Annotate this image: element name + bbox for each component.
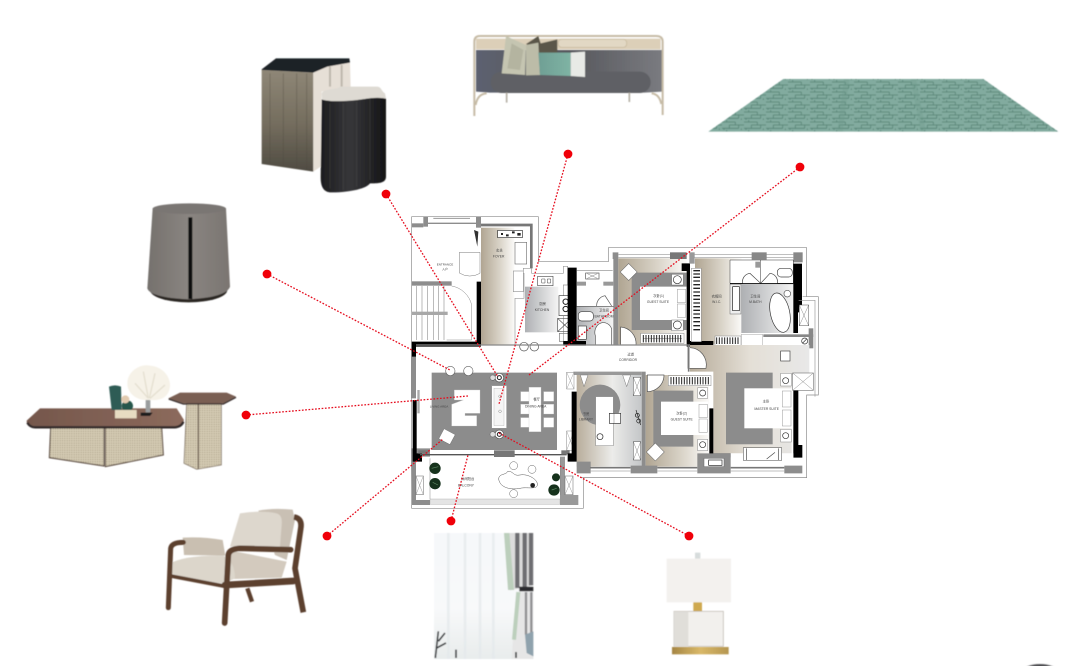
lower plan — [411, 345, 813, 505]
dining table: 餐厅 — [533, 397, 541, 402]
line: side tables — [386, 194, 498, 377]
foyer — [481, 225, 531, 345]
living and dining rug — [432, 373, 557, 450]
line: curtain — [451, 455, 468, 521]
side table top — [168, 393, 236, 403]
upper drape — [504, 533, 533, 591]
guest suite lower — [646, 375, 711, 467]
brass stem — [693, 602, 702, 612]
guest suite lower: GUEST SUITE — [671, 417, 694, 421]
rear frame — [294, 517, 303, 612]
kitchen — [515, 266, 572, 351]
library: 书房 — [583, 411, 590, 416]
entrance and stairs — [412, 217, 481, 340]
master suite: MASTER SUITE — [754, 407, 780, 411]
line: armchair — [327, 439, 443, 536]
kitchen: 厨房 — [539, 301, 547, 306]
kitchen: KITCHEN — [535, 308, 550, 312]
entrance and stairs: ENTRANCE — [437, 263, 453, 267]
cane back — [476, 39, 661, 49]
lower drape — [512, 592, 533, 659]
corridor divider — [416, 343, 690, 347]
walk-in closet — [682, 258, 742, 347]
balcony: BALCONY — [458, 484, 475, 488]
floor plan — [411, 217, 818, 508]
lower back — [228, 550, 287, 579]
corridor label: CORRIDOR — [619, 358, 638, 362]
side table base — [184, 403, 221, 469]
connector lines — [246, 154, 800, 536]
entrance and stairs: 入户 — [442, 266, 448, 271]
rug — [700, 77, 1067, 133]
coffee table — [492, 386, 507, 428]
red markers — [242, 150, 804, 540]
stools — [446, 366, 473, 376]
side tables — [490, 373, 504, 439]
arm cushion — [183, 537, 225, 556]
divider wall — [642, 372, 646, 467]
living room sofa: LIVING AREA — [430, 405, 448, 409]
mirrored base — [674, 611, 723, 646]
library — [567, 372, 642, 467]
line: stool — [267, 274, 450, 370]
sofa — [474, 36, 663, 116]
foyer: 玄关 — [496, 247, 503, 252]
sheer folds — [448, 533, 493, 659]
corner fragment — [1023, 664, 1057, 666]
bathroom — [563, 268, 614, 346]
seat cushion — [168, 556, 235, 584]
balcony planters — [429, 463, 560, 496]
balcony lounge set — [499, 462, 537, 498]
master suite: 主卧 — [763, 398, 770, 403]
vase and flowers — [109, 365, 170, 418]
stool — [147, 203, 230, 302]
plan outer outline — [412, 217, 818, 508]
living room sofa — [430, 390, 480, 426]
upholstered back — [476, 50, 662, 93]
armchair plan — [439, 429, 455, 445]
line: coffee tables — [246, 396, 468, 415]
lamp shade — [667, 559, 731, 602]
table lamp — [667, 553, 731, 654]
lower perimeter walls — [577, 453, 807, 478]
guest suite lower: 次卧(2) — [676, 410, 687, 415]
coffee tables with decor — [27, 365, 236, 469]
back cushion — [230, 512, 282, 547]
master bathroom: M.BATH — [749, 300, 762, 304]
large table top — [27, 408, 184, 427]
back cushion rear — [258, 509, 295, 560]
line: sofa — [499, 154, 568, 404]
right cabinet and corner — [763, 297, 818, 397]
lamp finial — [695, 553, 700, 559]
frame — [168, 542, 293, 623]
pillows — [502, 36, 585, 77]
corridor label: 过道 — [627, 352, 635, 357]
bathroom: BATHROOM — [595, 315, 614, 319]
sofa frame — [474, 36, 663, 116]
large table base — [49, 427, 163, 467]
dining table: DINING AREA — [525, 404, 547, 408]
walk-in closet: 衣帽间 — [712, 294, 722, 299]
corridor label — [619, 352, 638, 362]
sofa legs — [507, 93, 629, 103]
guest suite top: 次卧(1) — [653, 293, 664, 298]
balcony: 休闲阳台 — [461, 476, 475, 481]
seat cushion — [491, 72, 651, 93]
master bathroom — [689, 252, 803, 346]
bathroom: 卫生间 — [599, 308, 610, 313]
tree branches — [435, 631, 516, 658]
line: lamp — [499, 433, 689, 536]
library: LIBRARY — [579, 417, 594, 421]
cane inset — [558, 39, 627, 47]
brass plinth — [672, 647, 729, 654]
balcony — [411, 357, 578, 505]
back table — [262, 58, 351, 172]
master bathroom: 卫生间 — [750, 293, 761, 298]
front table — [321, 87, 386, 192]
guest suite top: GUEST SUITE — [647, 300, 670, 304]
foyer: FOYER — [493, 254, 505, 258]
armchair — [168, 509, 303, 623]
nesting side tables — [262, 58, 386, 192]
walk-in closet: W.I.C. — [712, 300, 721, 304]
black entrance walls — [412, 282, 481, 357]
master suite — [688, 345, 813, 463]
curtain — [434, 533, 533, 659]
line: rug — [529, 167, 800, 375]
dining table — [521, 387, 554, 432]
guest suite top — [613, 252, 687, 345]
